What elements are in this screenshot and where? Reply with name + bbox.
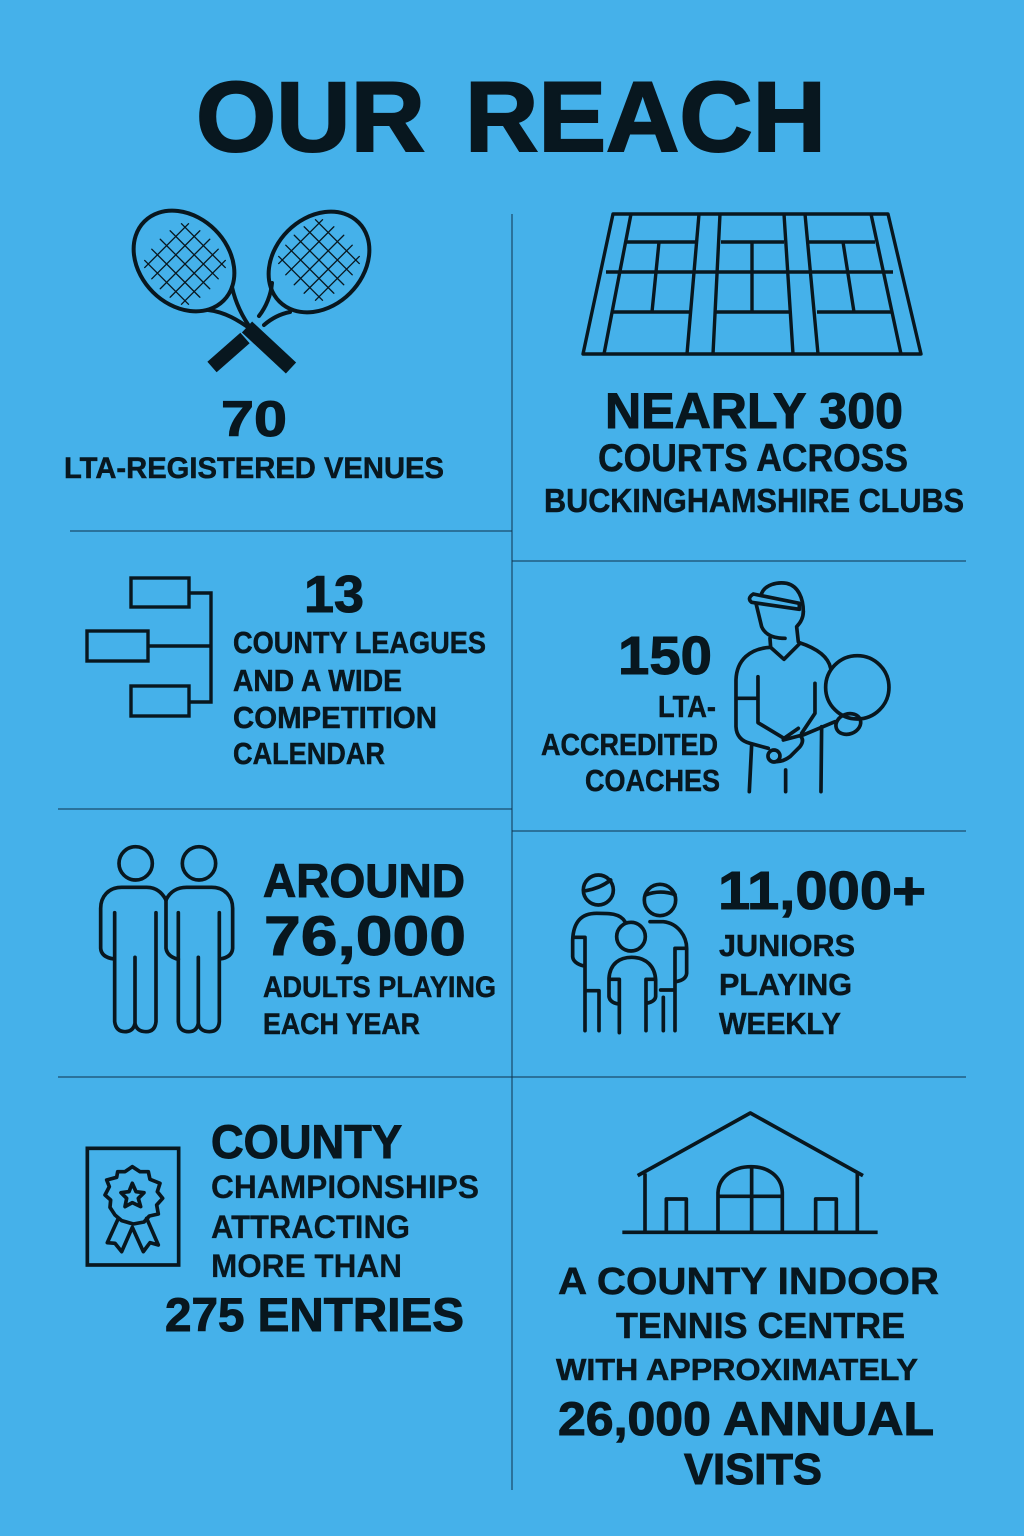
icon: family with junior xyxy=(573,875,687,1033)
label: county leagues: COMPETITION xyxy=(233,700,437,735)
label: courts across: COURTS ACROSS xyxy=(598,437,908,480)
stat: 26,000 annual visits: 26,000 ANNUAL xyxy=(558,1392,934,1445)
stat: 13: 13 xyxy=(304,566,364,624)
label: LTA-accredited coaches: COACHES xyxy=(585,763,720,798)
label: LTA-accredited coaches: ACCREDITED xyxy=(541,727,718,762)
label: county indoor tennis centre: TENNIS CENTRE xyxy=(616,1305,905,1346)
panel: courts xyxy=(544,214,964,519)
label: juniors playing weekly xyxy=(719,928,855,1041)
label: LTA-accredited coaches xyxy=(541,689,720,798)
stat: 70: 70 xyxy=(221,391,287,447)
panel: venues xyxy=(64,190,444,485)
label: LTA-accredited coaches: LTA- xyxy=(658,689,716,724)
label: juniors playing weekly: WEEKLY xyxy=(719,1006,841,1041)
label: county leagues: AND A WIDE xyxy=(233,663,402,698)
stat: 11,000+: 11,000+ xyxy=(718,861,926,921)
panel: indoor centre xyxy=(556,1113,939,1494)
title: REACH xyxy=(465,61,826,172)
panel: leagues xyxy=(87,566,486,771)
title xyxy=(196,61,826,172)
panel: coaches xyxy=(541,583,889,798)
label: county championships: ATTRACTING xyxy=(211,1209,410,1245)
label: juniors playing weekly: PLAYING xyxy=(719,967,852,1002)
label: county leagues: CALENDAR xyxy=(233,736,385,771)
label: Buckinghamshire clubs: BUCKINGHAMSHIRE CLUBS xyxy=(544,482,964,519)
icon: certificate rosette xyxy=(87,1148,179,1265)
label: county championships: MORE THAN xyxy=(211,1248,402,1284)
label: adults playing: ADULTS PLAYING xyxy=(263,971,496,1004)
label: county leagues xyxy=(233,625,486,771)
label: county indoor tennis centre: A COUNTY INDOOR xyxy=(558,1261,939,1303)
label: adults playing xyxy=(263,971,496,1041)
stat: around 76,000: 76,000 xyxy=(264,904,466,967)
panel: adults xyxy=(101,847,496,1041)
label: juniors playing weekly: JUNIORS xyxy=(719,928,855,963)
icon: indoor tennis centre building xyxy=(622,1113,878,1232)
stat: around 76,000: AROUND xyxy=(263,854,465,907)
label: county indoor tennis centre: WITH APPROXIMATELY xyxy=(556,1352,918,1387)
stat: 26,000 annual visits xyxy=(558,1392,934,1494)
label: county championships: CHAMPIONSHIPS xyxy=(211,1169,479,1205)
stat: 26,000 annual visits: VISITS xyxy=(684,1445,822,1494)
stat: 275 entries: 275 ENTRIES xyxy=(165,1288,464,1341)
icon: tennis courts xyxy=(583,214,921,354)
stat: 150: 150 xyxy=(618,626,712,686)
label: county championships: COUNTY xyxy=(211,1115,402,1168)
stat: nearly 300: NEARLY 300 xyxy=(605,383,903,439)
icon: competition bracket xyxy=(87,578,211,716)
label: county championships xyxy=(211,1115,479,1284)
icon: crossed tennis rackets xyxy=(113,190,390,368)
title: OUR xyxy=(196,61,425,172)
stat: around 76,000 xyxy=(263,854,466,967)
icon: two adults xyxy=(101,847,233,1032)
label: county indoor tennis centre xyxy=(556,1261,939,1387)
panel: championships xyxy=(87,1115,479,1341)
panel: juniors xyxy=(573,861,926,1041)
icon: coach with racket xyxy=(736,583,889,792)
label: county leagues: COUNTY LEAGUES xyxy=(233,625,486,660)
label: venues: LTA-REGISTERED VENUES xyxy=(64,452,444,485)
label: adults playing: EACH YEAR xyxy=(263,1008,420,1041)
